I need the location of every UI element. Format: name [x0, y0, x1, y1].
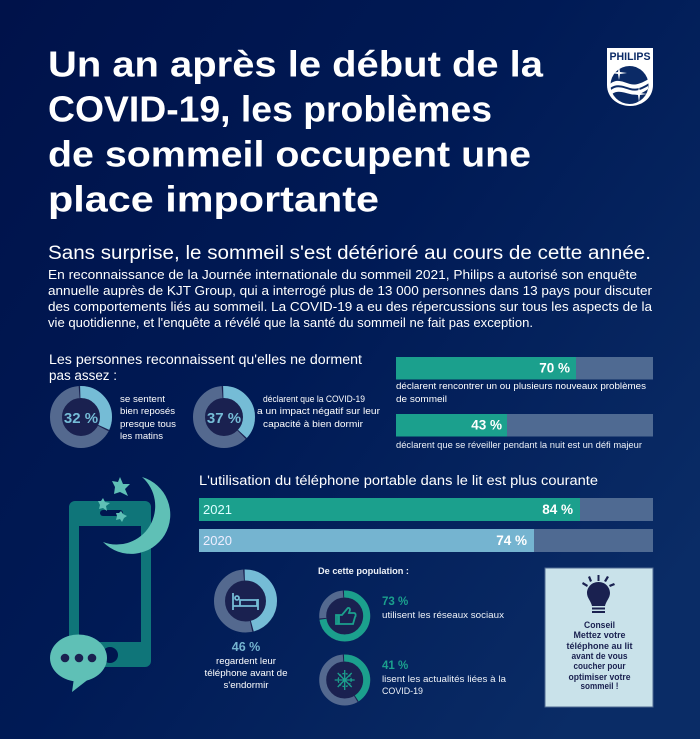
- heading: not enough sleep: Les personnes reconnaissent qu'elles ne dorment: [49, 352, 362, 367]
- bar: 2021 84 %: [199, 498, 653, 521]
- donut: 46 % with bed icon: [220, 575, 272, 627]
- text: 46 % looks at phone: 46 %: [232, 640, 260, 654]
- text: 46 % looks at phone: [204, 640, 288, 690]
- advice text: [566, 620, 633, 692]
- text: 46 % looks at phone: regardent leur: [216, 656, 276, 666]
- text: 46 % looks at phone: s'endormir: [224, 680, 268, 690]
- intro paragraph: En reconnaissance de la Journée internationale du sommeil 2021, Philips a autorisé son enquête: [48, 267, 637, 282]
- donut: 37 %: 37 %: [207, 410, 241, 427]
- bar: 2021 84 %: 2021: [203, 502, 232, 517]
- icon: phone with moon, stars and speech bubble: [50, 477, 170, 692]
- advice text: coucher pour: [574, 661, 626, 672]
- bar: 70 %: [396, 357, 653, 380]
- intro paragraph: des comportements liés au sommeil. La COVID-19 a eu des répercussions sur tous les aspects de la: [48, 299, 653, 314]
- text: COVID impact: déclarent que la COVID-19: [263, 394, 365, 404]
- text: COVID impact: capacité à bien dormir: [263, 419, 363, 429]
- bar caption: 70 %: [396, 381, 646, 404]
- text: well rested: les matins: [120, 431, 163, 441]
- text: 73 % social networks: [382, 596, 504, 620]
- donut: 32 %: [56, 392, 106, 442]
- title: [48, 44, 544, 220]
- bar: 2020 74 %: 74 %: [496, 533, 527, 548]
- text: COVID impact: [257, 394, 380, 429]
- icon: Philips logo: PHILIPS: [610, 51, 650, 63]
- icon: light bulb: [582, 575, 615, 613]
- heading: of this population: De cette population :: [318, 566, 409, 576]
- advice text: Conseil: [584, 620, 615, 631]
- icon: Philips logo: [607, 48, 653, 106]
- heading: not enough sleep: pas assez :: [49, 368, 117, 383]
- text: COVID impact: a un impact négatif sur leur: [257, 406, 380, 416]
- heading: phone use in bed: L'utilisation du téléphone portable dans le lit est plus courante: [199, 473, 598, 488]
- text: 41 % COVID news: [382, 660, 507, 696]
- bar: 43 %: 43 %: [471, 418, 502, 432]
- callout: advice: [545, 568, 653, 707]
- text: 41 % COVID news: COVID-19: [382, 686, 423, 696]
- title: de sommeil occupent une: [48, 134, 531, 174]
- intro paragraph: annuelle auprès de KJT Group, qui a interrogé plus de 13 000 personnes dans 13 pays pour discuter: [48, 283, 653, 298]
- donut: 73 % with thumb icon: [323, 594, 367, 638]
- text: 46 % looks at phone: téléphone avant de: [204, 668, 288, 678]
- bar caption: 70 %: déclarent rencontrer un ou plusieurs nouveaux problèmes: [396, 381, 646, 391]
- bar: 70 %: 70 %: [539, 360, 570, 376]
- bar caption: 70 %: de sommeil: [396, 394, 447, 404]
- text: 73 % social networks: 73 %: [382, 596, 408, 608]
- intro paragraph: [48, 267, 653, 330]
- bar: 2021 84 %: 84 %: [542, 502, 573, 517]
- text: well rested: se sentent: [120, 394, 165, 404]
- title: Un an après le début de la: [48, 44, 544, 84]
- text: well rested: bien reposés: [120, 406, 175, 416]
- advice text: Mettez votre: [574, 630, 626, 641]
- text: 73 % social networks: utilisent les réseaux sociaux: [382, 610, 504, 620]
- text: 41 % COVID news: 41 %: [382, 660, 408, 672]
- advice text: téléphone au lit: [566, 641, 633, 652]
- title: COVID-19, les problèmes: [48, 88, 492, 130]
- intro subtitle: Sans surprise, le sommeil s'est détérioré au cours de cette année.: [48, 243, 651, 264]
- heading: not enough sleep: [49, 352, 362, 383]
- advice text: avant de vous: [572, 651, 628, 662]
- bar: 2020 74 %: [199, 529, 653, 552]
- text: well rested: [120, 394, 176, 441]
- bar: 2020 74 %: 2020: [203, 533, 232, 548]
- title: place importante: [48, 178, 379, 220]
- intro paragraph: vie quotidienne, et l'enquête a révélé que la santé du sommeil ne fait pas exception.: [48, 315, 533, 330]
- text: 41 % COVID news: lisent les actualités liées à la: [382, 674, 507, 684]
- donut: 32 %: 32 %: [64, 410, 98, 427]
- advice text: optimiser votre: [568, 672, 630, 683]
- donut: 41 % with virus icon: [323, 658, 367, 702]
- bar caption: 43 %: déclarent que se réveiller pendant la nuit est un défi majeur: [396, 440, 642, 450]
- text: well rested: presque tous: [120, 419, 176, 429]
- bar: 43 %: [396, 414, 653, 436]
- advice text: sommeil !: [580, 681, 618, 692]
- donut: 37 %: [199, 392, 249, 442]
